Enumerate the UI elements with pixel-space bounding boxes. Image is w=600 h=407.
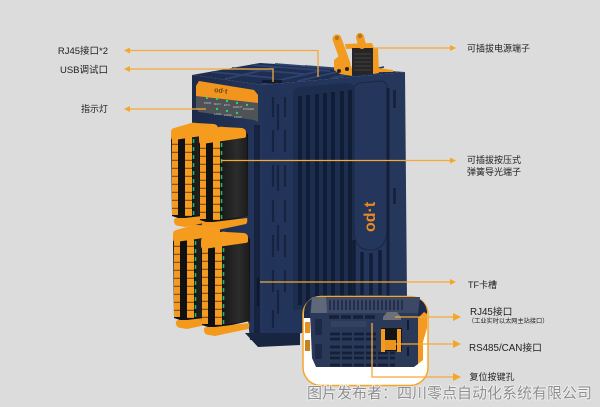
side slots — [273, 97, 285, 328]
label: power connector: 可插拔电源端子 — [467, 42, 530, 54]
callout inset: bottom view — [303, 296, 428, 386]
leader: spring terminals — [221, 158, 456, 164]
inset device body — [304, 297, 427, 367]
watermark: 图片发布者：四川零点自动化系统有限公司 — [307, 385, 592, 402]
label: spring terminals: 可插拔按压式 — [467, 154, 521, 165]
terminal block: upper front — [199, 127, 248, 231]
leader: inset RJ45 — [395, 313, 461, 321]
label: inset RS485: RS485/CAN接口 — [469, 341, 542, 354]
leader: power connector — [373, 45, 456, 51]
top vented face — [192, 63, 405, 85]
label: spring terminals — [467, 154, 521, 177]
terminal block: lower rear — [173, 225, 222, 329]
label: TF slot: TF卡槽 — [468, 279, 497, 290]
leader: inset RS485 — [395, 340, 461, 348]
LED captions: LAN1 — [214, 112, 222, 116]
panel logo: od·t — [214, 87, 228, 96]
DIN rail foot — [245, 333, 300, 347]
side details — [407, 320, 409, 330]
label: spring terminals: 弹簧导光端子 — [467, 166, 521, 177]
front recessed panel — [293, 83, 354, 311]
leader: indicator — [124, 106, 206, 112]
leader: inset reset — [372, 323, 461, 381]
RS485 connector — [381, 328, 402, 351]
label: inset reset: 复位按键孔 — [470, 371, 515, 382]
leader: TF slot — [260, 279, 456, 285]
vent grid — [329, 315, 376, 319]
status indicator panel — [196, 81, 258, 122]
leader: RJ45*2 — [124, 48, 318, 77]
label: inset RJ45 — [468, 305, 548, 325]
leader: USB — [124, 66, 273, 82]
LED captions: PWR — [204, 101, 212, 105]
LED captions: MAINT — [233, 105, 242, 109]
label: inset RJ45: RJ45接口 — [470, 305, 512, 318]
brand logo on front: od·t — [362, 201, 379, 232]
USB port on top — [262, 80, 282, 83]
LED captions: LAN3 — [234, 115, 242, 119]
LED captions: POWER — [243, 107, 255, 111]
pluggable power connector — [334, 34, 393, 76]
raised logo bar — [354, 81, 387, 250]
LED dots — [206, 97, 248, 114]
label: inset RJ45: （工业实时以太网主站接口） — [468, 317, 548, 325]
LED captions: LAN2 — [224, 113, 232, 117]
LED captions — [204, 101, 255, 119]
terminal block: lower front — [201, 232, 250, 336]
label: RJ45*2: RJ45接口*2 — [58, 45, 108, 57]
RJ45 port — [383, 312, 401, 320]
LED captions: ETC — [224, 103, 231, 107]
label: USB: USB调试口 — [60, 64, 108, 76]
orange side rails — [418, 312, 427, 364]
right slits — [386, 88, 390, 296]
left side face — [192, 75, 263, 340]
right front face — [263, 72, 407, 345]
device: controller enclosure — [192, 63, 407, 347]
front vertical ribs — [300, 90, 350, 305]
terminal block: upper rear — [171, 123, 220, 227]
label: indicator: 指示灯 — [81, 103, 108, 114]
LED captions: RUN — [214, 102, 220, 106]
